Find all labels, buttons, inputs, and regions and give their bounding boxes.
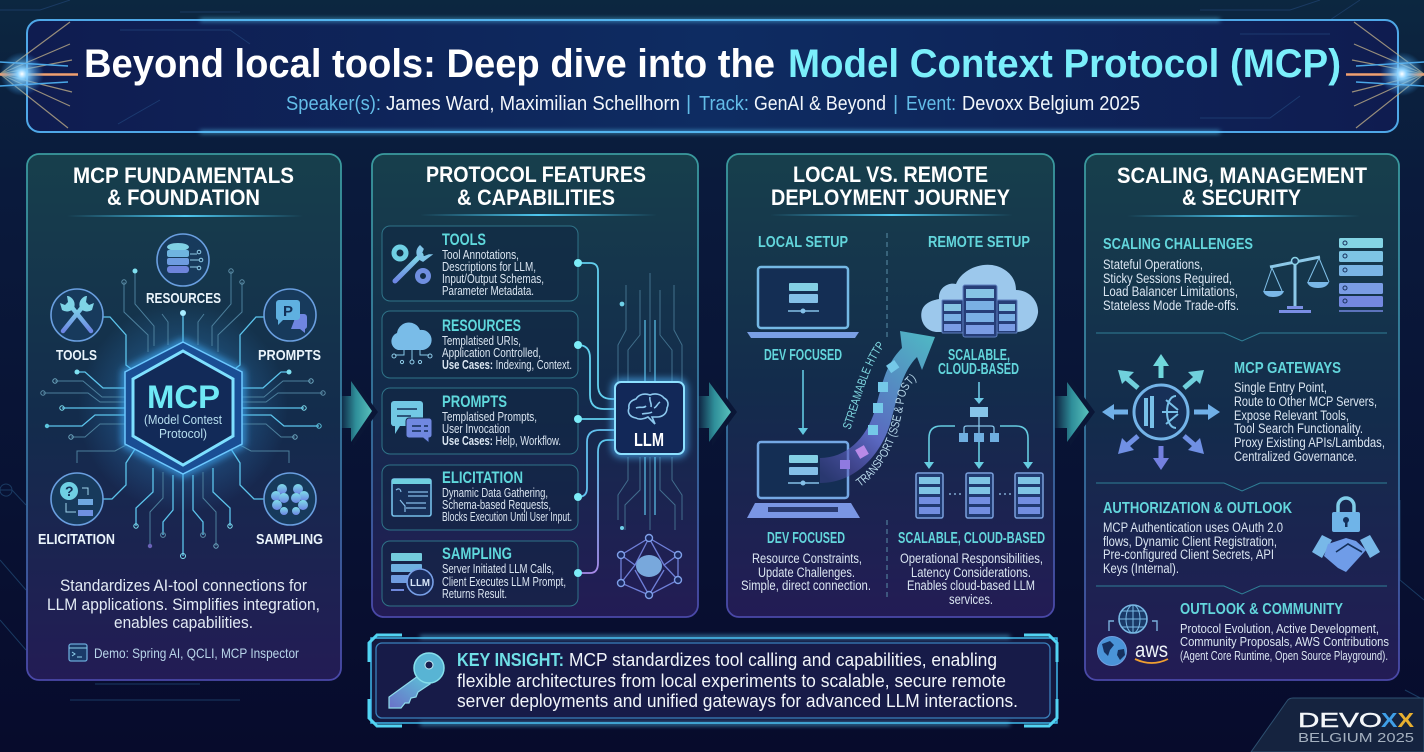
text block: outlook and community: OUTLOOK & COMMUNITY <box>1180 601 1344 618</box>
logo: Devoxx Belgium 2025 <box>1251 698 1424 752</box>
summary text <box>47 576 320 632</box>
text block: outlook and community: Protocol Evolution, Active Development, <box>1180 621 1379 636</box>
icon: local laptop bottom <box>747 442 860 518</box>
icon: local laptop top <box>747 267 859 338</box>
text block: MCP gateways: Expose Relevant Tools, <box>1234 408 1349 423</box>
text block: MCP gateways: Route to Other MCP Servers, <box>1234 394 1377 409</box>
feature card: elicitation: Blocks Execution Until User Input. <box>442 509 572 524</box>
icon: padlock <box>1332 498 1360 532</box>
heading: fundamentals: & FOUNDATION <box>107 185 260 210</box>
icon: cloud with servers <box>921 265 1038 337</box>
node: tools <box>51 289 103 364</box>
text block: remote trade-offs: Enables cloud-based LLM <box>907 578 1035 593</box>
panel: local vs remote <box>726 153 1055 618</box>
logo: Devoxx Belgium 2025: XX <box>1381 710 1415 732</box>
text block: scaling challenges: SCALING CHALLENGES <box>1103 236 1253 253</box>
LLM decorative traces <box>618 273 682 530</box>
speaker, track and event line: GenAI & Beyond <box>754 93 886 115</box>
feature card: tools: Parameter Metadata. <box>442 283 534 298</box>
icon: form window <box>392 479 431 516</box>
node: elicitation: ? <box>65 483 74 499</box>
summary text: enables capabilities. <box>114 613 253 632</box>
node: prompts: P <box>283 303 293 320</box>
arrow: fundamentals to features <box>340 378 378 446</box>
label: local setup: LOCAL SETUP <box>758 234 848 251</box>
feature card: sampling: Returns Result. <box>442 586 507 601</box>
arrow: deployment to scaling <box>1055 378 1095 446</box>
heading: features <box>426 162 646 210</box>
text block: scaling challenges: Stateful Operations, <box>1103 257 1203 272</box>
text block: scaling challenges: Load Balancer Limitations, <box>1103 284 1238 299</box>
speaker, track and event line: | <box>686 93 691 115</box>
icon: terminal <box>69 644 87 661</box>
speaker, track and event line: Devoxx Belgium 2025 <box>962 93 1140 115</box>
text block: outlook and community: Community Proposals, AWS Contributions <box>1180 634 1389 649</box>
feature card: sampling: Server Initiated LLM Calls, <box>442 561 554 576</box>
feature card: tools: Tool Annotations, <box>442 247 519 262</box>
feature card: tools: Input/Output Schemas, <box>442 271 544 286</box>
text block: MCP gateways: Proxy Existing APIs/Lambdas, <box>1234 435 1385 450</box>
feature card: elicitation: ELICITATION <box>442 468 523 487</box>
heading: fundamentals: MCP FUNDAMENTALS <box>73 163 294 188</box>
text block: remote trade-offs <box>898 530 1045 607</box>
feature card: prompts: Templatised Prompts, <box>442 409 537 424</box>
icon: cloud <box>391 323 432 364</box>
feature card: sampling: Client Executes LLM Prompt, <box>442 574 566 589</box>
circuit traces <box>41 268 325 558</box>
icon: server with LLM badge: LLM <box>410 578 430 589</box>
node: resources: RESOURCES <box>146 290 221 307</box>
node: sampling <box>256 473 323 548</box>
icon: server with LLM badge <box>391 553 433 595</box>
feature card: resources: Use Cases: Indexing, Context. <box>442 357 572 372</box>
summary text: LLM applications. Simplifies integration, <box>47 595 320 614</box>
arrow: features to deployment <box>698 378 737 446</box>
feature card: resources <box>382 311 578 378</box>
feature card: tools <box>382 226 578 301</box>
header banner <box>27 20 1398 132</box>
connectors to LLM <box>574 259 616 577</box>
LLM box <box>615 382 684 454</box>
icon: gears and wrench <box>394 246 431 282</box>
lens flare left <box>0 22 78 128</box>
label: scalable cloud-based upper: CLOUD-BASED <box>938 361 1019 378</box>
heading: scaling: & SECURITY <box>1182 185 1301 210</box>
node: elicitation <box>38 473 115 548</box>
speaker, track and event line: Speaker(s): <box>286 93 381 115</box>
speaker, track and event line: Track: <box>699 93 749 115</box>
arrow: streamable HTTP transport <box>820 331 935 486</box>
callout: key insight <box>369 635 1057 726</box>
logo: Devoxx Belgium 2025: BELGIUM 2025 <box>1298 731 1414 745</box>
diagram: load balancer tree <box>924 382 1033 469</box>
text block: authorization: Keys (Internal). <box>1103 561 1179 576</box>
text block: MCP gateways: MCP GATEWAYS <box>1234 360 1341 377</box>
arrow: streamable HTTP transport: TRANSPORT (SSE & POST) <box>855 374 916 486</box>
text block: local trade-offs: Update Challenges. <box>758 565 855 580</box>
speaker, track and event line: James Ward, Maximilian Schellhorn <box>386 93 680 115</box>
feature card: resources: Templatised URIs, <box>442 333 521 348</box>
node: elicitation: ELICITATION <box>38 531 115 548</box>
feature card: sampling <box>382 541 578 606</box>
node: resources <box>146 234 221 307</box>
icon: server stack <box>1339 238 1383 311</box>
text block: authorization: MCP Authentication uses OAuth 2.0 <box>1103 520 1283 535</box>
heading: scaling: SCALING, MANAGEMENT <box>1117 163 1368 188</box>
panel: MCP fundamentals <box>27 154 341 680</box>
title <box>84 42 1341 86</box>
feature card: tools: Descriptions for LLM, <box>442 259 536 274</box>
icon: earth <box>1098 636 1126 666</box>
text block: remote trade-offs: services. <box>949 592 993 607</box>
title: Model Context Protocol (MCP) <box>788 42 1341 86</box>
insight text: MCP standardizes tool calling and capabilities, enabling <box>569 649 997 670</box>
insight text: server deployments and unified gateways for advanced LLM interactions. <box>457 690 1018 711</box>
icon: handshake <box>1312 535 1380 572</box>
text block: local trade-offs <box>741 530 871 593</box>
icon: brain outline <box>628 394 668 424</box>
speaker, track and event line <box>286 93 1140 115</box>
insight text: flexible architectures from local experiments to scalable, secure remote <box>457 670 1006 691</box>
LLM box: LLM <box>634 430 664 450</box>
text block: outlook and community <box>1180 601 1389 663</box>
heading: features: & CAPABILITIES <box>457 185 615 210</box>
node: tools: TOOLS <box>56 347 97 364</box>
heading: fundamentals <box>73 163 294 210</box>
text block: scaling challenges <box>1103 236 1253 313</box>
feature card: tools: TOOLS <box>442 230 486 249</box>
heading: deployment: LOCAL VS. REMOTE <box>793 162 988 187</box>
speaker, track and event line: | <box>893 93 898 115</box>
text block: local trade-offs: Resource Constraints, <box>752 551 862 566</box>
text block: authorization: flows, Dynamic Client Registration, <box>1103 534 1277 549</box>
hexagon glow <box>78 303 288 513</box>
text block: remote trade-offs: Operational Responsibilities, <box>900 551 1043 566</box>
feature card: elicitation: Schema-based Requests, <box>442 497 551 512</box>
heading: deployment: DEPLOYMENT JOURNEY <box>771 185 1010 210</box>
text block: authorization <box>1103 500 1293 576</box>
summary text: Standardizes AI-tool connections for <box>60 576 307 595</box>
icon: key <box>389 653 444 708</box>
feature card: prompts: PROMPTS <box>442 392 507 411</box>
title: Beyond local tools: Deep dive into the <box>84 42 775 86</box>
insight text: KEY INSIGHT: <box>457 649 564 670</box>
icon: chat bubbles <box>391 401 432 443</box>
feature card: sampling: SAMPLING <box>442 544 512 563</box>
feature card: prompts <box>382 388 578 454</box>
lens flare right <box>1346 22 1424 128</box>
heading: scaling <box>1117 163 1368 210</box>
label: scalable cloud-based upper <box>938 347 1019 378</box>
feature card: prompts: Use Cases: Help, Workflow. <box>442 433 561 448</box>
feature card: elicitation: Dynamic Data Gathering, <box>442 485 548 500</box>
icon: gateway hub with arrows <box>1102 354 1220 470</box>
panel: protocol features <box>372 154 698 617</box>
text block: local trade-offs: Simple, direct connection. <box>741 578 871 593</box>
text block: remote trade-offs: SCALABLE, CLOUD-BASED <box>898 530 1045 547</box>
text block: MCP gateways <box>1234 360 1385 464</box>
MCP hexagon <box>125 342 242 474</box>
feature card: resources: RESOURCES <box>442 316 521 335</box>
text block: local trade-offs: DEV FOCUSED <box>767 530 845 547</box>
icon: balance scale <box>1263 257 1329 313</box>
text block: scaling challenges: Sticky Sessions Required, <box>1103 271 1232 286</box>
text block: MCP gateways: Single Entry Point, <box>1234 380 1327 395</box>
text block: remote trade-offs: Latency Considerations. <box>911 565 1031 580</box>
feature card: resources: Application Controlled, <box>442 345 541 360</box>
text block: scaling challenges: Stateless Mode Trade-offs. <box>1103 298 1239 313</box>
node: prompts: PROMPTS <box>258 347 321 364</box>
text block: MCP gateways: Tool Search Functionality. <box>1234 421 1363 436</box>
text block: MCP gateways: Centralized Governance. <box>1234 449 1357 464</box>
label: remote setup: REMOTE SETUP <box>928 234 1030 251</box>
heading: features: PROTOCOL FEATURES <box>426 162 646 187</box>
text block: authorization: AUTHORIZATION & OUTLOOK <box>1103 500 1293 517</box>
panel: scaling management security <box>1085 154 1399 680</box>
icon: server racks <box>916 473 1043 518</box>
feature card: elicitation <box>382 465 578 530</box>
MCP hexagon: Protocol) <box>159 427 207 441</box>
logo: aws: aws <box>1135 639 1168 662</box>
label: dev focused upper: DEV FOCUSED <box>764 347 842 364</box>
logo: Devoxx Belgium 2025: DEVO <box>1298 710 1382 732</box>
arrow: local down <box>798 370 808 435</box>
feature card: prompts: User Invocation <box>442 421 510 436</box>
MCP hexagon: (Model Contest <box>144 413 222 427</box>
heading: deployment <box>771 162 1010 210</box>
node: prompts <box>258 289 321 364</box>
arrow: streamable HTTP transport: STREAMABLE HTTP <box>843 342 882 430</box>
text block: authorization: Pre-configured Client Secrets, API <box>1103 547 1274 562</box>
speaker, track and event line: Event: <box>906 93 956 115</box>
demo note: Demo: Spring AI, QCLI, MCP Inspector <box>94 645 299 661</box>
icon: network globe <box>1109 605 1157 633</box>
MCP hexagon: MCP <box>147 379 220 415</box>
insight text <box>457 649 1018 711</box>
icon: neural network brain <box>618 534 682 598</box>
label: scalable cloud-based upper: SCALABLE, <box>948 347 1010 364</box>
node: sampling: SAMPLING <box>256 531 323 548</box>
